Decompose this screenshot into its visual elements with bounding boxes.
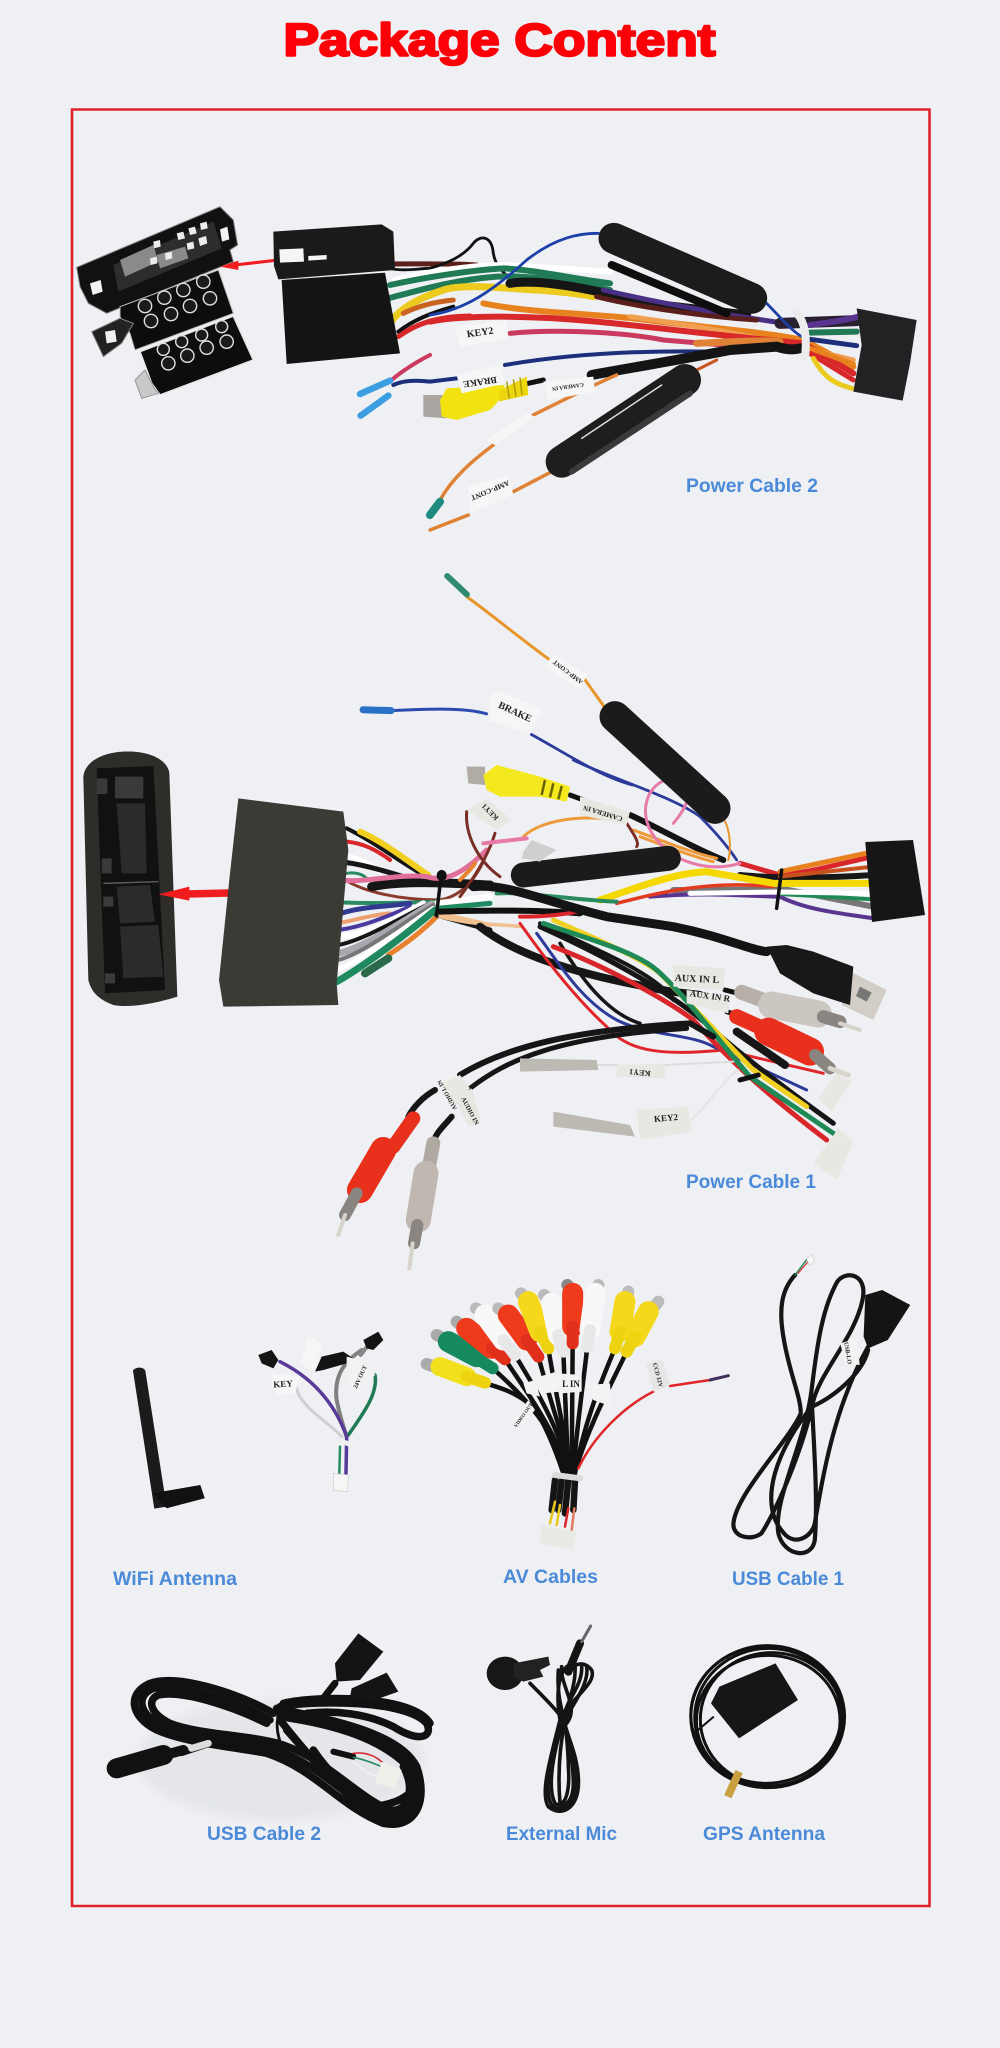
USB tag: [840, 1338, 860, 1365]
cable tag text: AUX IN L: AUX IN L: [674, 973, 720, 986]
cable tags: [453, 320, 595, 513]
icon: ISO connector: [77, 207, 253, 398]
icon: blue spade terminals: [360, 381, 390, 416]
AV cable tags and white plug: [513, 1359, 670, 1550]
left harness wires: [337, 828, 490, 982]
cable tag text: 24V OUT: 24V OUT: [353, 1365, 369, 1390]
cable tag text: AUDIO L IN: AUDIO L IN: [437, 1078, 459, 1110]
cable tag text: KEY: KEY: [273, 1378, 294, 1390]
cable tag text: CAMERA IN: CAMERA IN: [582, 803, 624, 823]
icon: filter box upper: [612, 238, 752, 313]
cable tag text: KEY2: KEY2: [466, 326, 494, 340]
icon: filter box diagonal: [615, 717, 715, 808]
icon: foam block: [219, 798, 348, 1007]
icon: lapel mic: [487, 1626, 592, 1811]
caption: GPS Antenna: GPS Antenna: [703, 1824, 825, 1845]
caption: WiFi Antenna: WiFi Antenna: [113, 1569, 237, 1590]
icon: AV cables bundle: [427, 1285, 728, 1530]
icon: black connector block: [273, 224, 400, 364]
icon: USB sockets: [335, 1633, 398, 1702]
caption: USB Cable 2: USB Cable 2: [207, 1824, 321, 1845]
cable tag text: KEY1: KEY1: [480, 802, 500, 822]
cable tag text: AMP-CONT: AMP-CONT: [469, 478, 511, 503]
icon: filter box lower: [562, 380, 690, 472]
red frame panel: [72, 110, 930, 1906]
panel: accessories row 2: [117, 1626, 845, 1845]
caption: Power Cable 1: Power Cable 1: [686, 1172, 816, 1193]
cable tag text: AUDIO IN: AUDIO IN: [459, 1096, 480, 1127]
icon: USB cable 1 coil: [733, 1258, 868, 1553]
icon: small white connector: [806, 1255, 815, 1265]
cable tag text: BRAKE: BRAKE: [496, 700, 534, 725]
arrow: red foam arrow: [158, 887, 258, 901]
icon: small key cable: [258, 1332, 383, 1492]
upper wires: [363, 576, 632, 785]
cable shadow: [137, 1700, 423, 1820]
icon: yellow RCA plug: [467, 765, 570, 802]
cable tag text: L IN: L IN: [562, 1379, 580, 1389]
panel: power cable 1: [83, 576, 925, 1268]
icon: spade terminals: [520, 1058, 635, 1137]
wire harness: [430, 233, 858, 530]
cable tag text: AMP-CONT: AMP-CONT: [551, 658, 585, 685]
wires left of harness: [388, 238, 610, 385]
cable tag text: VIDEO OUT: VIDEO OUT: [514, 1402, 535, 1429]
cable tag text: USB: USB-LO: [842, 1342, 852, 1365]
panel: accessories row 1: [113, 1255, 910, 1590]
icon: USB socket: [864, 1290, 910, 1348]
icon: USB plug: [767, 945, 887, 1020]
right harness wires: [408, 760, 873, 1143]
arrow: red connector arrow: [220, 260, 278, 270]
cable tag text: BRAKE: BRAKE: [462, 374, 497, 388]
caption: External Mic: External Mic: [506, 1824, 617, 1845]
caption: Power Cable 2: Power Cable 2: [686, 476, 818, 497]
icon: foam connector end view: [83, 751, 177, 1006]
cable tag text: CCD 12V: CCD 12V: [651, 1362, 663, 1389]
cable tag text: KEY1 lower: KEY1: [629, 1067, 651, 1078]
icon: right connector: [853, 308, 917, 401]
caption: AV Cables: AV Cables: [503, 1567, 598, 1588]
icon: filter box horizontal: [523, 858, 668, 875]
icon: GPS antenna: [691, 1646, 845, 1797]
icon: USB cable 2 coil: [117, 1681, 430, 1824]
icon: WiFi antenna: [133, 1368, 205, 1509]
panel: power cable 2: [77, 207, 917, 530]
cable tag text: AUX IN R: AUX IN R: [689, 988, 731, 1004]
title: Package Content: [284, 15, 716, 66]
icon: yellow RCA plug: [423, 377, 528, 420]
icon: grey and red RCA plugs: [338, 992, 860, 1268]
white plug connectors and cable tags: [440, 797, 853, 1180]
icon: white connector: [375, 1762, 402, 1788]
icon: right connector: [865, 840, 925, 922]
upper cable tags: [489, 654, 588, 734]
cable tag text: KEY2 lower: KEY2: [654, 1112, 679, 1124]
cable tag text: CAMERA IN: CAMERA IN: [552, 381, 584, 391]
icon: white plug behind filter: [522, 840, 557, 862]
caption: USB Cable 1: USB Cable 1: [732, 1569, 844, 1590]
